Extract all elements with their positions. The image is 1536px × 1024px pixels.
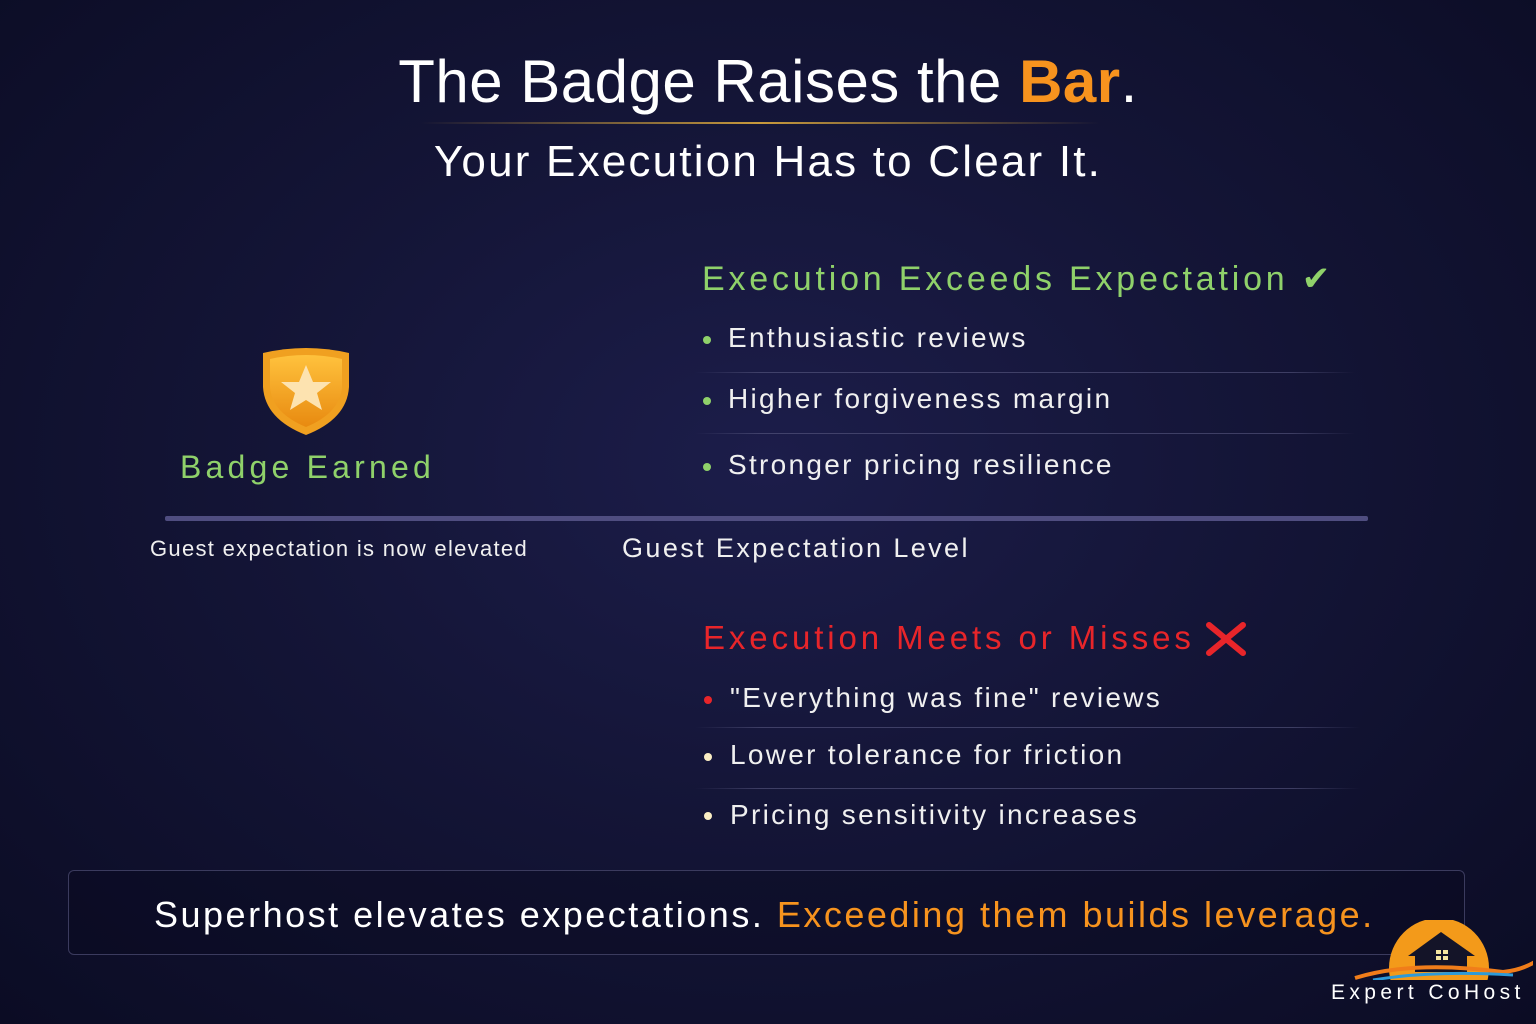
bullet: Pricing sensitivity increases xyxy=(730,799,1139,830)
panel: misses xyxy=(703,619,1349,830)
subtitle: Your Execution Has to Clear It. xyxy=(434,137,1102,186)
bullet: "Everything was fine" reviews xyxy=(730,682,1162,713)
bullet: Stronger pricing resilience xyxy=(728,449,1114,480)
heading misses: Execution Meets or Misses xyxy=(703,619,1195,656)
left caption: Guest expectation is now elevated xyxy=(150,536,528,561)
title: The Badge Raises the Bar. xyxy=(398,48,1138,115)
bottom callout xyxy=(68,870,1465,955)
expectation level line xyxy=(165,516,1368,521)
icon: shield badge xyxy=(263,348,349,435)
bottom callout: Superhost elevates expectations. Exceeding them builds leverage. xyxy=(154,894,1375,935)
panel: badge xyxy=(180,348,435,485)
logo text: Expert CoHost xyxy=(1331,981,1525,1004)
badge label: Badge Earned xyxy=(180,449,435,485)
title underline xyxy=(420,122,1100,124)
icon: house sun xyxy=(1354,920,1533,980)
bullet: Enthusiastic reviews xyxy=(728,322,1028,353)
icon: red X xyxy=(1206,622,1246,656)
bullet: Lower tolerance for friction xyxy=(730,739,1124,770)
heading exceeds: Execution Exceeds Expectation ✔ xyxy=(702,260,1334,298)
line label: Guest Expectation Level xyxy=(622,533,970,563)
bullet: Higher forgiveness margin xyxy=(728,383,1112,414)
panel: exceeds xyxy=(702,260,1344,480)
logo xyxy=(1331,920,1533,1004)
